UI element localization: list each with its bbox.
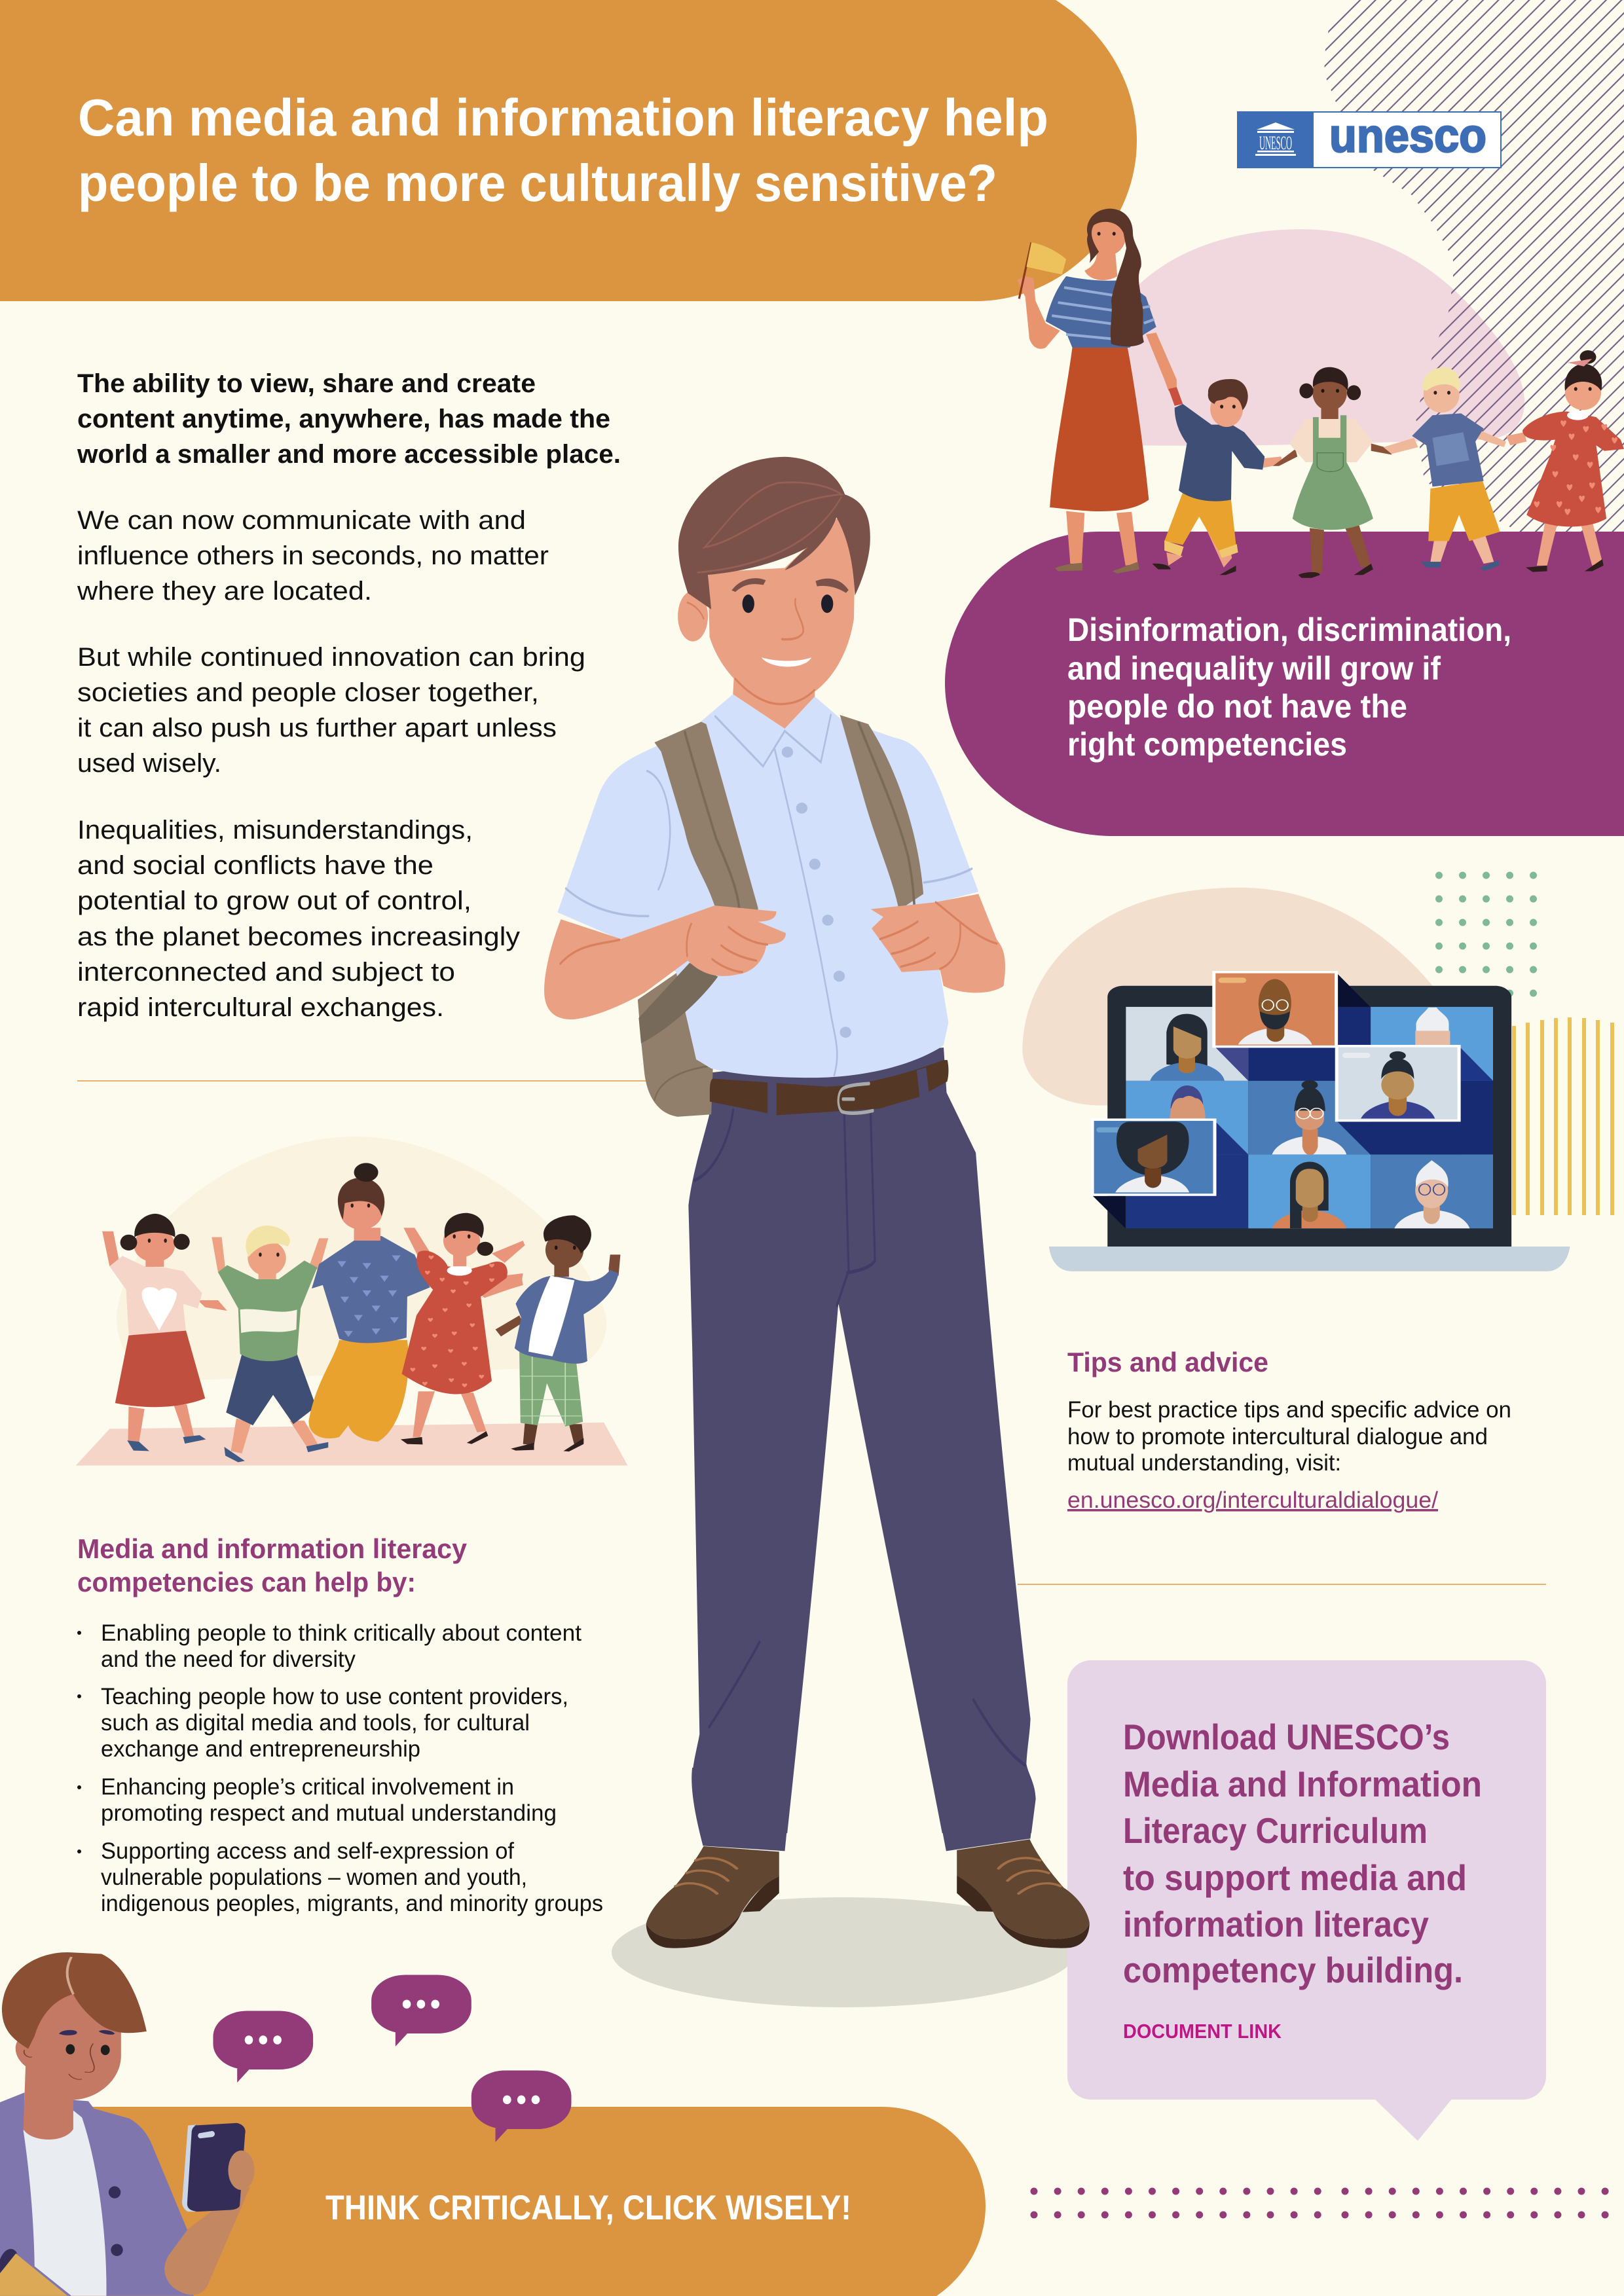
shoes xyxy=(646,1839,1090,1948)
bullet list: exchange and entrepreneurship xyxy=(101,1736,420,1762)
left text block: intro: it can also push us further apart unless xyxy=(77,714,557,742)
person with smartphone xyxy=(0,1952,255,2296)
tips and advice: For best practice tips and specific advice on xyxy=(1067,1397,1511,1423)
head xyxy=(678,457,870,729)
video grid xyxy=(1126,1007,1493,1228)
bullet list: indigenous peoples, migrants, and minority groups xyxy=(101,1891,603,1916)
trouser cuffs xyxy=(692,1768,1035,1851)
bullet list: Enhancing people’s critical involvement in xyxy=(101,1774,514,1800)
participant: woman with long hair bottom xyxy=(1272,1162,1346,1228)
subheading: competencies xyxy=(77,1533,468,1597)
bullet list: promoting respect and mutual understanding xyxy=(101,1800,557,1826)
boy in blue jacket xyxy=(496,1215,620,1451)
blond boy in green xyxy=(212,1226,328,1463)
left text block: intro: used wisely. xyxy=(77,749,221,778)
left text block: intro: where they are located. xyxy=(77,577,372,606)
download panel: information literacy xyxy=(1123,1904,1429,1944)
left arm xyxy=(544,905,786,1019)
participant: woman top left xyxy=(1150,1014,1225,1081)
tips and advice xyxy=(1067,1347,1511,1513)
backpack straps xyxy=(654,721,758,924)
bullet list: Supporting access and self-expression of xyxy=(101,1838,514,1864)
callout text: right competencies xyxy=(1067,726,1347,763)
bullet list: Teaching people how to use content providers, xyxy=(101,1684,568,1709)
callout text xyxy=(1067,611,1511,763)
tips and advice: en.unesco.org/interculturaldialogue/ xyxy=(1067,1487,1438,1513)
left text block: intro: and social conflicts have the xyxy=(77,851,434,880)
left text block: intro: The ability to view, share and create xyxy=(77,369,536,398)
callout text: Disinformation, discrimination, xyxy=(1067,611,1511,648)
banner slogan: THINK CRITICALLY, CLICK WISELY! xyxy=(325,2189,851,2227)
participant: woman with bun and glasses xyxy=(1272,1080,1346,1155)
download panel: competency building. xyxy=(1123,1950,1463,1990)
tips and advice: Tips and advice xyxy=(1067,1347,1268,1377)
upper body xyxy=(544,457,1005,1078)
callout text: and inequality will grow if xyxy=(1067,650,1441,687)
left text block: intro: societies and people closer together, xyxy=(77,678,539,707)
bottom banner xyxy=(0,2107,986,2296)
illustration: teacher and children holding hands xyxy=(1017,209,1624,578)
download panel xyxy=(1067,1660,1546,2141)
title xyxy=(78,88,1048,212)
backpack xyxy=(638,894,713,1117)
woman kneeling in the centre xyxy=(308,1163,523,1442)
yellow stripes xyxy=(1514,1017,1612,1215)
bullet list: Enabling people to think critically about content xyxy=(101,1620,581,1646)
bullet list: vulnerable populations – women and youth, xyxy=(101,1865,527,1890)
hatched background pattern xyxy=(1323,0,1624,532)
purple callout panel xyxy=(945,532,1624,836)
left text block: intro: Inequalities, misunderstandings, xyxy=(77,816,473,845)
title: people to be more culturally sensitive? xyxy=(78,154,997,212)
bullet list: and the need for diversity xyxy=(101,1647,356,1672)
speech bubble 3 xyxy=(471,2070,571,2142)
floating window: man with beard xyxy=(1214,972,1337,1047)
boy in blue t-shirt xyxy=(1383,367,1506,571)
girl in green pinafore xyxy=(1273,367,1392,578)
title: Can media and information literacy help xyxy=(78,88,1048,147)
floating window: woman with afro xyxy=(1092,1120,1215,1195)
left text block: intro: as the planet becomes increasingly xyxy=(77,922,520,951)
UNESCO logo xyxy=(1238,110,1501,168)
left text block: intro: rapid intercultural exchanges. xyxy=(77,993,444,1022)
subheading: competencies: Media and information literacy xyxy=(77,1533,468,1564)
bullet list: such as digital media and tools, for cultural xyxy=(101,1710,530,1736)
download panel: Download UNESCO’s xyxy=(1123,1717,1450,1757)
icon: temple xyxy=(1255,122,1296,156)
left text block: intro: We can now communicate with and xyxy=(77,506,526,535)
participant: centre-left xyxy=(1170,1085,1206,1119)
left text block: intro: world a smaller and more accessible place. xyxy=(77,440,621,469)
girl with heart t-shirt xyxy=(102,1214,227,1451)
belt xyxy=(710,1060,948,1117)
pink blob behind children xyxy=(1127,229,1524,446)
participant: woman back top right xyxy=(1415,1008,1450,1045)
subheading: competencies: competencies can help by: xyxy=(77,1567,416,1597)
teacher xyxy=(1017,209,1183,574)
green dots xyxy=(1439,875,1545,993)
girl in red dress xyxy=(1506,350,1624,572)
UNESCO logo: unesco xyxy=(1329,110,1486,162)
header banner xyxy=(0,0,1137,301)
left text block: intro xyxy=(77,369,621,1022)
left text block: intro: But while continued innovation can bring xyxy=(77,643,585,672)
illustration: laptop with video call xyxy=(1022,888,1570,1271)
illustration: group of dancing children xyxy=(76,1137,628,1466)
speech bubble 1 xyxy=(213,2011,313,2083)
ground shadow under figure xyxy=(612,1897,1075,2007)
download panel: Media and Information xyxy=(1123,1764,1482,1804)
download panel: DOCUMENT LINK xyxy=(1123,2020,1282,2043)
participant: elderly woman xyxy=(1394,1160,1469,1228)
boy in navy xyxy=(1152,379,1283,575)
floating window: woman with bun xyxy=(1337,1046,1459,1121)
download panel: to support media and xyxy=(1123,1857,1467,1898)
purple dots xyxy=(1034,2191,1608,2215)
tips and advice: mutual understanding, visit: xyxy=(1067,1450,1341,1476)
girl in red dress waving xyxy=(401,1213,525,1444)
download panel: Literacy Curriculum xyxy=(1123,1810,1428,1851)
right arm xyxy=(870,894,1005,993)
left text block: intro: interconnected and subject to xyxy=(77,958,455,987)
UNESCO logo: UNESCO xyxy=(1259,132,1292,154)
speech bubbles and person with phone xyxy=(0,1952,571,2296)
window shadows xyxy=(1215,1048,1248,1081)
trousers xyxy=(688,1048,1036,1833)
speech bubble 2 xyxy=(371,1975,471,2047)
left text block: intro: potential to grow out of control, xyxy=(77,886,471,915)
callout text: people do not have the xyxy=(1067,688,1407,725)
tips and advice: how to promote intercultural dialogue and xyxy=(1067,1424,1488,1449)
bullet list xyxy=(77,1620,603,1916)
left text block: intro: influence others in seconds, no matter xyxy=(77,541,549,570)
shirt details xyxy=(566,715,972,1076)
left text block: intro: content anytime, anywhere, has made the xyxy=(77,405,610,433)
main figure: student with backpack xyxy=(544,457,1090,1948)
